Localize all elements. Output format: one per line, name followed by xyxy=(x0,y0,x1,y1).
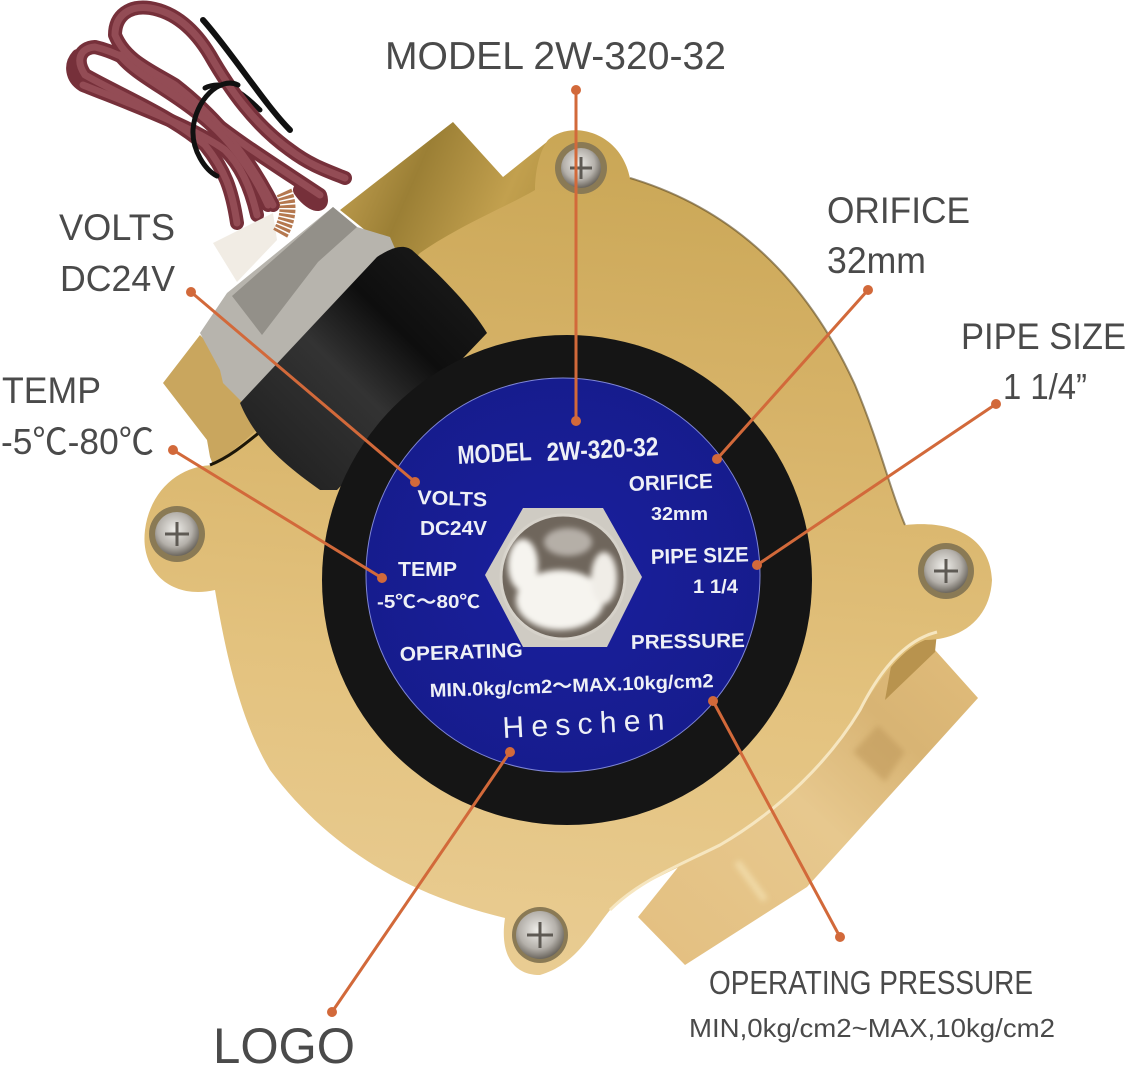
blue label xyxy=(366,378,760,772)
heading: model: MODEL 2W-320-32 xyxy=(385,35,726,78)
screw right xyxy=(918,543,974,599)
wire band back xyxy=(205,85,260,110)
nut xyxy=(485,508,642,647)
flange body xyxy=(144,130,992,975)
label text on the blue plate: 32mm xyxy=(651,504,708,524)
screw top xyxy=(555,142,607,194)
upper pipe port xyxy=(340,122,600,300)
wire strand highlights xyxy=(80,7,345,223)
screw bottom xyxy=(512,907,568,963)
left pipe port xyxy=(163,335,285,470)
black housing xyxy=(322,335,812,825)
dome xyxy=(501,515,625,639)
label text on the blue plate xyxy=(377,431,749,745)
callout: pipe size xyxy=(752,399,1001,570)
label text on the blue plate: DC24V xyxy=(420,518,488,540)
callout: operating pressure xyxy=(708,696,845,942)
label text on the blue plate: OPERATING xyxy=(399,640,523,666)
port shade xyxy=(853,725,905,782)
label text on the blue plate: PRESSURE xyxy=(631,630,745,654)
port highlight xyxy=(737,862,765,900)
heading: volts: VOLTS xyxy=(59,207,175,248)
wire strand shadows xyxy=(73,7,345,223)
callout: volts xyxy=(186,287,420,487)
label text on the blue plate: Heschen xyxy=(502,704,665,745)
wire band front xyxy=(193,83,238,176)
flange edge highlight xyxy=(610,632,937,910)
value: operating pressure: MIN,0kg/cm2~MAX,10kg/cm2 xyxy=(689,1013,1055,1043)
screw left xyxy=(149,506,205,562)
label text on the blue plate: VOLTS xyxy=(417,487,488,511)
label text on the blue plate: 2W-320-32 xyxy=(546,431,659,467)
port shadow under right ear xyxy=(885,632,937,700)
label text on the blue plate: TEMP xyxy=(398,559,457,581)
solenoid valve illustration xyxy=(73,7,992,975)
heading: temp: TEMP xyxy=(2,370,101,411)
callout: model xyxy=(571,85,581,426)
grey cap xyxy=(200,207,400,410)
callout lines xyxy=(168,85,1001,1017)
cap upper facet xyxy=(232,207,357,335)
label text on the blue plate: ORIFICE xyxy=(628,470,713,496)
callout: temp xyxy=(168,445,387,583)
value: orifice: 32mm xyxy=(827,240,926,281)
label text on the blue plate: PIPE SIZE xyxy=(651,543,749,569)
heading: orifice: ORIFICE xyxy=(827,190,970,231)
label text on the blue plate: MIN.0kg/cm2～MAX.10kg/cm2 xyxy=(429,671,714,702)
label text on the blue plate: 1 1/4 xyxy=(693,577,738,598)
white sleeve xyxy=(213,213,277,282)
copper wire ends xyxy=(280,192,287,234)
value: temp: -5℃-80℃ xyxy=(1,421,154,462)
wires xyxy=(73,7,345,223)
callout: orifice xyxy=(712,285,873,464)
callout: logo xyxy=(327,747,515,1017)
label text on the blue plate: -5℃～80℃ xyxy=(377,592,480,612)
lower pipe port xyxy=(638,650,978,965)
value: pipe size: 1 1/4” xyxy=(1003,366,1087,407)
heading: operating pressure: OPERATING PRESSURE xyxy=(709,964,1033,1001)
black coil xyxy=(240,247,487,490)
black wire xyxy=(203,20,290,130)
left flange shadow xyxy=(210,420,275,465)
label text on the blue plate: MODEL xyxy=(457,436,532,470)
value: volts: DC24V xyxy=(60,258,175,299)
flange shadow edge xyxy=(630,178,905,525)
